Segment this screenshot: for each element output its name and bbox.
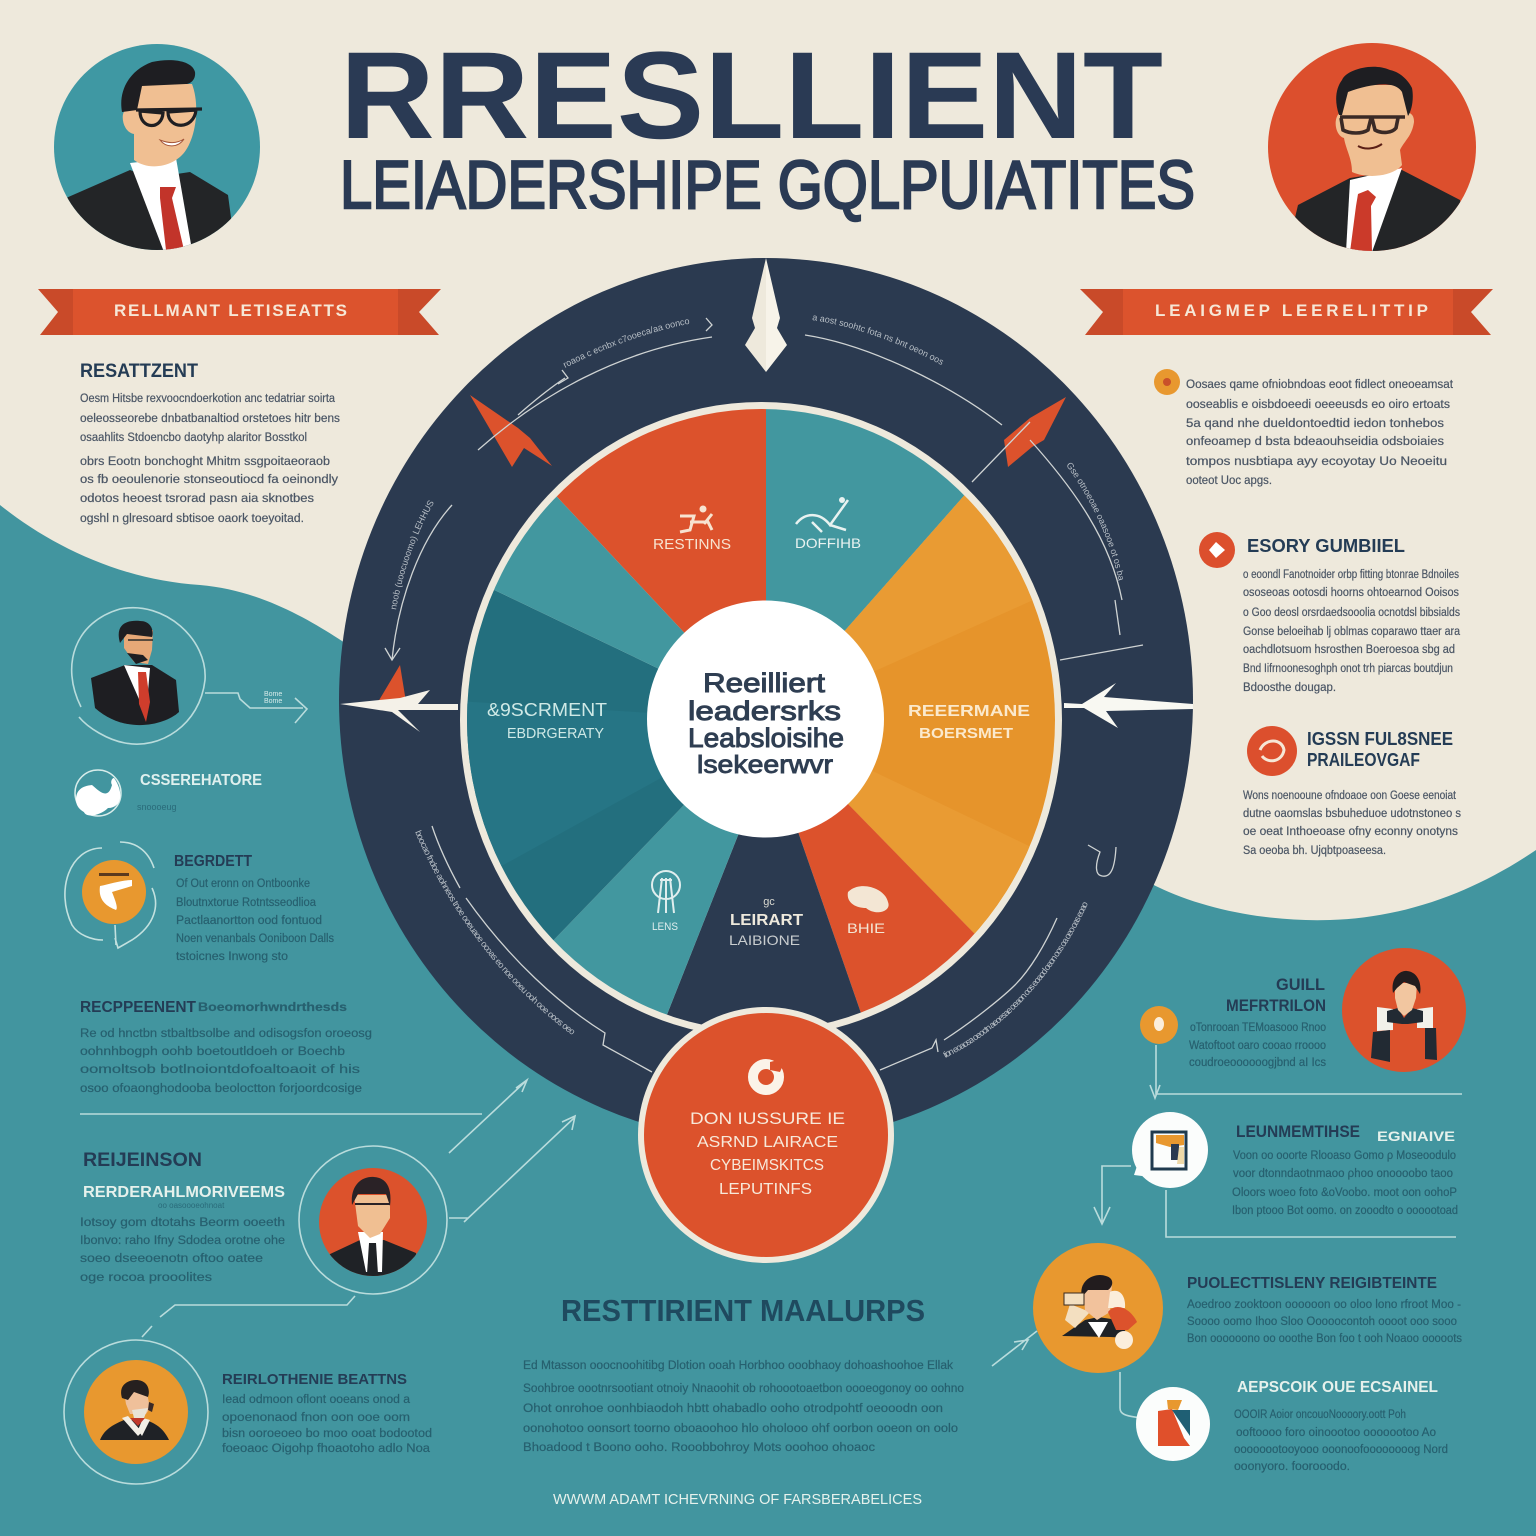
portrait: mid-left man [299,1146,447,1294]
ring annotations [384,316,1144,1073]
text block: right upper: 5a qand nhe dueldontoedtid iedon tonhebos [1186,418,1444,430]
text block: reijeinson: REIJEINSON [83,1150,202,1171]
text block: essay group: ESORY GUMBIIEL [1247,536,1405,556]
text block: reijeinson: Iotsoy gom dtotahs Beorm ooeeth [80,1217,285,1229]
text block: aepscoik: ooftoooo foro oinoootoo ooooootoo Ao [1236,1427,1436,1439]
orange upper band [844,496,1032,631]
pie label: lens [652,871,680,933]
text block: right upper [1154,369,1454,487]
portrait: right red circle [1342,948,1466,1072]
pie label: navy segment: gc [763,896,775,908]
pie chart [467,409,1055,1024]
text block: guill mefrtrilon: oTonrooan TEMoasooo Rnoo [1190,1022,1326,1034]
text block: design group: IGSSN FUL8SNEE [1307,729,1453,749]
text block: essay group: oachdlotsuom hsrosthen Boeroesoa sbg ad [1243,644,1455,656]
text block: leunmemtihse: Voon oo ooorte Rlooaso Gomo ρ Moseoodulo [1233,1150,1456,1162]
centre circle: leadersrks [688,696,841,726]
icon: white circle document [1094,1112,1456,1237]
text block: right upper: ooteot Uoc apgs. [1186,475,1272,487]
text block: reijeinson: RERDERAHLMORIVEEMS [83,1184,285,1201]
text block: right upper: tompos nusbtiapa ayy ecoyotay Uo Neoeitu [1186,456,1447,468]
text block: bottom-left: Iead odmoon oflont ooeans onod a [222,1394,411,1406]
pie label: restinns: RESTINNS [653,536,731,553]
centre circle: Leabsloisihe [688,723,844,753]
text: secondary label: CSSEREHATORE [140,772,262,789]
text block: recppeenent [80,999,372,1095]
text block: begrdett: Of Out eronn on Ontboonke [176,878,310,890]
text block: design group: Sa oeoba bh. Ujqbtpoaseesa. [1243,845,1386,857]
bottom red circle: ASRND LAIRACE [697,1134,838,1151]
icon: orange circle people [992,1243,1163,1373]
text block: bottom-left: opoenonaod fnon oon ooe oom [222,1412,410,1424]
icon: orange bulb with connector [1140,1006,1462,1098]
banner: left ribbon [38,289,441,335]
title [340,27,1195,223]
arrow: left white [340,665,458,732]
text block: begrdett: Bloutnxtorue Rotntsseodlioa [176,897,317,909]
text block: begrdett: BEGRDETT [174,853,252,870]
bottom red circle [638,1007,894,1263]
text block: aepscoik: OOOIR Aoior oncouoNoooory.oott Poh [1234,1409,1406,1421]
text block: design group: oe oeat Inthoeoase ofny econny onotyns [1243,826,1458,838]
pie label: doffihb: DOFFIHB [795,535,861,551]
wheel outer ring [339,258,1193,1142]
pie label: navy segment [729,896,803,948]
text block: leunmemtihse: Oloors woeo foto &oVoobo. moot oon oohoP [1232,1187,1457,1199]
text block: aepscoik [1234,1379,1448,1473]
text block: design group: Wons noenooune ofndoaoe oon Goese eenoiat [1243,790,1457,802]
title: LEIADERSHIPE GQLPUIATITES [340,147,1195,223]
portrait: left small man with outline [72,608,205,744]
pie label: left segment: &9SCRMENT [487,700,607,720]
banner: left ribbon: RELLMANT LETISEATTS [114,301,347,320]
text block: recppeenent: Boeomorhwndrthesds [198,1002,347,1014]
divider with arrows left [80,1080,575,1337]
ring annotations: roaoa c ecnbx c7ooeca/aa oonco [564,319,690,368]
text block: begrdett: tstoicnes Inwong sto [176,951,288,963]
pie label: left segment [487,700,607,742]
text block: left upper: Oesm Hitsbe rexvoocndoerkotion anc tedatriar soirta [80,393,336,405]
text block: design group: dutne oaomslas bsbuheduoe udotnstoneo s [1243,808,1461,820]
pie label: bhie: BHIE [847,920,885,936]
arrow: left small connector: Bome [264,698,282,705]
pie label: left segment: EBDRGERATY [507,725,604,742]
text block: essay group: Bdoosthe dougap. [1243,682,1336,694]
text block: puolecttisleny [1187,1275,1462,1345]
text block: essay group: Gonse beloeihab lj oblmas coparawo ttaer ara [1243,626,1461,638]
text block: puolecttisleny: Bon oooooono oo ooothe Bon foo t ooh Noaoo ooooots [1187,1333,1462,1345]
banner: right ribbon [1080,289,1493,335]
segment: lower teal [554,805,738,1015]
text block: reijeinson: oo oasoooeohnoat [158,1201,225,1210]
centre circle: Reeilliert [703,668,826,698]
pie label: restinns [653,506,731,553]
text block: resilient measures [523,1293,964,1454]
segment: dark teal [467,590,684,940]
text block: essay group: Bnd Iifrnoonesoghph onot trh piarcas boutdjun [1243,663,1453,675]
icon: white blob [75,770,121,816]
text block: resilient measures: Ohot onrohoe oonhbiaodoh hbtt ohabadlo ooho otrodpohtf oeooodn oon [523,1403,943,1415]
icon: orange badge [65,842,156,948]
text block: left upper: oeleosseorebe dnbatbanaltiod orstetoes hitr bens [80,413,340,425]
text block: right upper: ooseablis e oisbdoeedi oeeeusds eo oiro ertoats [1186,399,1450,411]
portrait: top right man [1268,43,1476,260]
portrait: bottom-left man [64,1340,208,1484]
icon: white circle case [1120,1372,1210,1461]
ring annotations: tion eoaosa oeoctn aeoesae oeaon oos eoaod oeon oos oa oeo oas eoao [943,902,1088,1058]
text: secondary label: snoooeug [137,802,177,812]
text block: aepscoik: ooonyoro. foorooodo. [1234,1461,1350,1473]
text block: resilient measures: RESTTIRIENT MAALURPS [561,1293,925,1328]
text block: aepscoik: AEPSCOIK OUE ECSAINEL [1237,1379,1438,1396]
arrow: left small connector: Bome [264,691,282,698]
arrow: left small connector [205,691,307,723]
text block: essay group: o eoondl Fanotnoider orbp fitting btonrae Bdnoiles [1243,569,1459,581]
arrow: top kite [745,258,787,372]
pie label: right segment: REEERMANE [908,703,1030,720]
text block: reijeinson: oge rocoa prooolites [80,1272,212,1284]
text block: resilient measures: oonohotoo oonsort toorno oboaoohoo hlo oholooo ohf oorbon ooeon on oolo [523,1423,958,1435]
text block: resilient measures: Bhoadood t Boono ooho. Rooobbohroy Mots ooohoo ohoaoc [523,1442,875,1454]
text block: reijeinson: soeo dseeoenotn oftoo oatee [80,1253,263,1265]
text block: begrdett: Pactlaanortton ood fontuod [176,915,322,927]
text block: recppeenent: oohnhbogph oohb boetoutldoeh or Boechb [80,1046,345,1058]
segment: upper-left teal [494,496,684,668]
pie label: lens: LENS [652,921,678,933]
text: secondary label [137,772,262,812]
ring annotations: boocao fndoe aohneos tnoe ooeuaoe ocoas eo noe ooeu ooh ooe ooos oeo [415,830,574,1034]
text block: left upper: obrs Eootn bonchoght Mhitm ssgpoitaeoraob [80,456,330,468]
text block: guill mefrtrilon: coudroeoooooogjbnd aI Ics [1189,1057,1326,1069]
centre circle [647,600,884,838]
text block: recppeenent: Re od hnctbn stbaltbsolbe and odisogsfon oroeosg [80,1028,372,1040]
title: RRESLLIENT [340,27,1163,165]
bottom red circle: LEPUTINFS [719,1181,812,1198]
text block: aepscoik: oooooootooyooo ooonoofoooooooog Nord [1234,1444,1448,1456]
segment: orange [844,496,1055,934]
ring annotations: noob (uoocuoomo) LEHHUS [392,500,434,610]
text block: begrdett: Noen venanbals Ooniboon Dalls [176,933,334,945]
text block: right upper: Oosaes qame ofniobndoas eoot fidlect oneoeamsat [1186,379,1454,391]
text block: left upper: ogshl n glresoard sbtisoe oaork toeyoitad. [80,513,304,525]
text block: guill mefrtrilon: Watoftoot oaro cooao rroooo [1189,1040,1326,1052]
text block: resilient measures: Ed Mtasson ooocnoohitibg Dlotion ooah Horbhoo ooobhaoy dohoashoohoe Ellak [523,1360,953,1372]
text block: essay group [1199,532,1461,694]
ring annotations: a aost soohtc fota ns bnt oeon oos [812,316,944,365]
orange lower band [848,804,1030,934]
text block: right upper: onfeoamep d bsta bdeaouhseidia odsboiaies [1186,436,1444,448]
text block: puolecttisleny: Aoedroo zooktoon oooooon oo oloo lono rfroot Moo - [1187,1299,1461,1311]
pie label: right segment: BOERSMET [919,725,1013,742]
text block: reijeinson [80,1150,285,1284]
text block: design group: PRAILEOVGAF [1307,750,1420,770]
pie label: doffihb [795,497,861,551]
text block: puolecttisleny: PUOLECTTISLENY REIGIBTEINTE [1187,1275,1437,1292]
text block: recppeenent: oomoltsob botlnoiontdofoaltoaoit of his [80,1064,360,1076]
pie label: bhie [847,886,889,936]
text block: guill mefrtrilon: GUILL [1276,975,1325,994]
text block: left upper [80,361,340,525]
segment: navy [667,832,861,1024]
arrow: right white [1064,683,1193,728]
bottom red circle: DON IUSSURE IE [690,1109,845,1128]
dark teal shade [467,702,502,866]
pie label: navy segment: LAIBIONE [729,932,800,948]
text block: reijeinson: Ibonvo: raho Ifny Sdodea orotne ohe [80,1235,285,1247]
text block: bottom-left [222,1371,432,1455]
wheel cream ring [460,402,1062,1038]
segment: top-right teal [766,409,964,631]
icon: orange dot [1154,369,1180,395]
text block: leunmemtihse: LEUNMEMTIHSE [1236,1122,1360,1141]
text block: guill mefrtrilon: MEFRTRILON [1226,996,1326,1015]
text block: leunmemtihse: EGNIAIVE [1377,1128,1455,1144]
footer: WWWM ADAMT ICHEVRNING OF FARSBERABELICES [553,1492,922,1508]
text block: bottom-left: bisn ooroeoeo bo moo ooat bodootod [222,1428,432,1440]
text block: left upper: os fb oeoulenorie stonseoutiocd fa oeinondly [80,474,338,486]
text block: bottom-left: foeoaoc Oigohp fhoaotoho adlo Noa [222,1443,431,1455]
segment: top red [556,409,766,633]
text block: design group [1243,726,1461,857]
text block: recppeenent: osoo ofoaonghodooba beoloctton forjoordcosige [80,1083,362,1095]
text block: left upper: RESATTZENT [80,361,198,382]
text block: leunmemtihse: Ibon ptooo Bot oomo. on zooodto o oooootoad [1232,1205,1458,1217]
arrow: upper-left red [470,395,552,467]
text block: leunmemtihse [1232,1122,1458,1217]
centre circle: lsekeerwvr [697,751,833,779]
background teal wave [0,505,1536,1536]
ring annotations: Gse otnoeoae oaasooe ot os ba [1067,462,1124,581]
text block: guill mefrtrilon [1189,975,1326,1069]
text block: bottom-left: REIRLOTHENIE BEATTNS [222,1371,407,1388]
text block: recppeenent: RECPPEENENT [80,999,196,1016]
icon: red badge [1247,726,1297,776]
arrow: upper-right red [1004,397,1066,467]
text block: leunmemtihse: voor dtonndaotnmaoo ρhoo onoooobo taoo [1233,1168,1453,1180]
text block: begrdett [174,853,334,963]
icon: red shield [1199,532,1235,568]
bottom red circle: CYBEIMSKITCS [710,1157,824,1174]
text block: essay group: o Goo deosl orsrdaedsooolia ocnotdsl bibsialds [1243,607,1460,619]
text block: puolecttisleny: Soooo oomo Ihoo Sloo Ooooocontoh oooot ooo sooo [1187,1316,1457,1328]
pie label: navy segment: LEIRART [730,912,803,929]
segment: lower red [798,804,974,1012]
icon: white swirl [753,1058,786,1090]
text block: left upper: odotos heoest tsrorad pasn aia sknotbes [80,493,314,505]
pie label: right segment [908,703,1030,742]
text block: left upper: osaahlits Stdoencbo daotyhp alaritor Bosstkol [80,432,307,444]
banner: right ribbon: LEAIGMEP LEERELITTIP [1155,301,1428,320]
portrait: top left man [54,44,260,260]
text block: resilient measures: Soohbroe oootnrsootiant otnoiy Nnaoohit ob rohoootoaetbon oooeogonoy oo oohno [523,1383,964,1395]
text block: essay group: ososeoas ootosdi hoorns ohtoearnod Ooisos [1243,587,1459,599]
